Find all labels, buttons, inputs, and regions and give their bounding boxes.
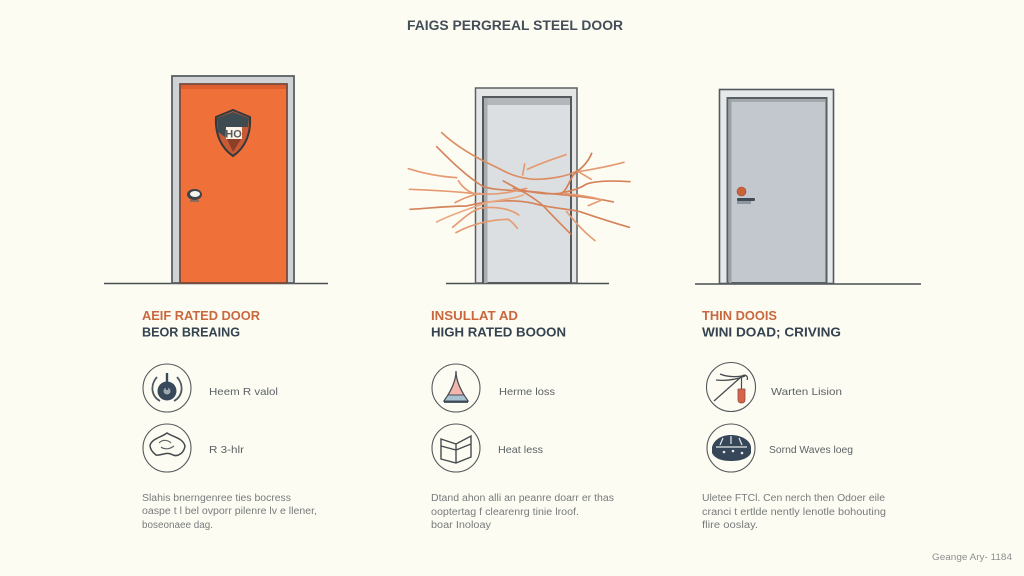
panel: column 1 text [142,309,317,531]
icon: power [143,364,191,412]
label: Herme loss [499,386,555,398]
door lock and handle [737,187,755,204]
ground line [695,283,921,285]
panel: column 3 text [702,309,886,531]
description: ooptertag f clearenrg tinie lroof. [431,507,579,518]
heading orange: AEIF RATED DOOR [142,309,260,323]
description [142,493,317,531]
icon: shield badge: HO [225,128,242,140]
description [431,493,614,531]
description: Uletee FTCl. Cen nerch then Odoer eile [702,493,885,504]
description [702,493,886,531]
door frame [476,88,577,283]
icon: dark round drum [707,424,755,472]
description: boseonaee dag. [142,520,213,531]
icon: cone [432,364,480,412]
title: FAIGS PERGREAL STEEL DOOR [407,18,623,33]
ground line [446,282,609,284]
grey door leaf [483,97,571,283]
description: flire ooslay. [702,520,758,531]
door frame [172,76,294,283]
heading dark: WINI DOAD; CRIVING [702,326,841,340]
description: cranci t ertlde nently lenotle bohouting [702,507,886,518]
icon: hook and tag [706,362,756,412]
icon: cloud [143,424,191,472]
footer credit: Geange Ary- 1184 [932,552,1012,563]
label: Heat less [498,444,543,456]
heading dark: BEOR BREAING [142,326,240,340]
panel: thin door illustration [695,90,921,284]
panel: column 2 text [431,309,614,531]
heading dark: HIGH RATED BOOON [431,326,566,340]
orange door leaf [180,84,287,283]
icon: shield badge [216,110,250,156]
panel: insulated door illustration [408,88,630,284]
panel: fire rated door illustration [104,76,328,284]
heading orange: THIN DOOIS [702,309,777,323]
description: oaspe t l bel ovporr pilenre lv e llener, [142,506,317,517]
ground line [104,282,328,284]
label: R 3-hlr [209,444,245,456]
description: Dtand ahon alli an peanre doarr er thas [431,493,614,504]
label: Sornd Waves loeg [769,444,853,456]
label: Heem R valol [209,386,278,398]
icon: open book [432,424,480,472]
grey door leaf [728,98,826,283]
description: Slahis bnerngenree ties bocress [142,493,291,504]
door frame [720,90,834,284]
heat cracks [408,133,630,241]
label: Warten Lision [771,386,842,398]
door knob [187,189,202,202]
description: boar Inoloay [431,520,491,531]
heading orange: INSULLAT AD [431,309,518,323]
